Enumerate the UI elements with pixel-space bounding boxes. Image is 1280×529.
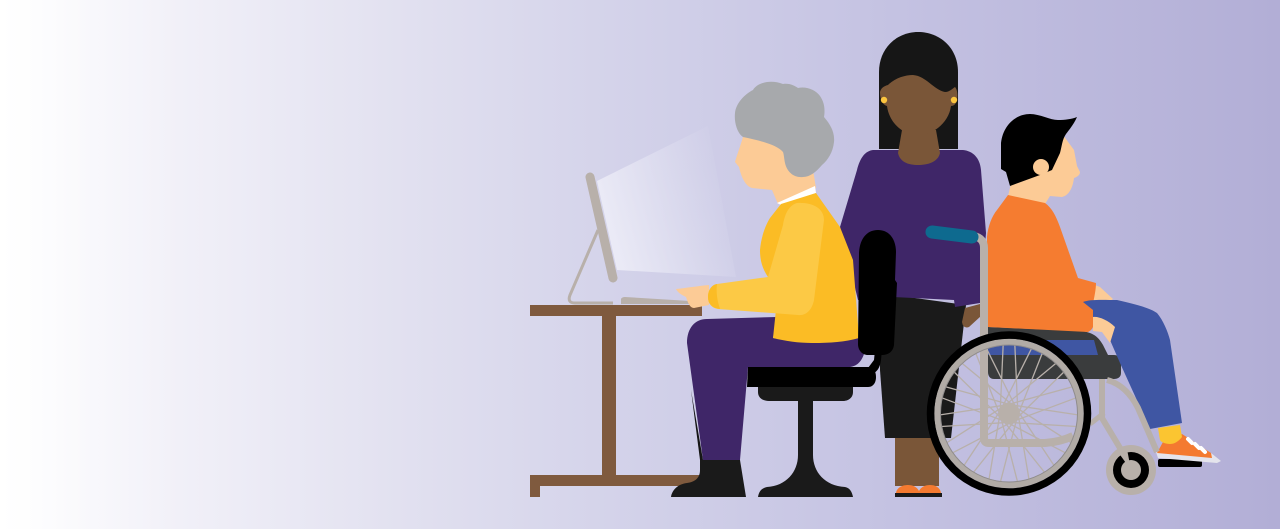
computer monitor (569, 126, 736, 304)
spokes (940, 345, 1078, 482)
ear (1033, 159, 1049, 175)
woman standing (840, 32, 986, 497)
wheelchair frame (974, 236, 1157, 468)
face (880, 75, 957, 135)
inner rim shade (940, 345, 1078, 482)
neck and face (735, 137, 816, 204)
long hair (879, 32, 958, 149)
sweater (760, 193, 859, 343)
purple top (840, 150, 986, 307)
seat cushion (988, 340, 1098, 355)
hub (998, 403, 1020, 424)
large wheel (930, 335, 1088, 492)
upper hand (1090, 285, 1113, 304)
small caster wheel (1106, 445, 1156, 495)
orange sweater (987, 195, 1096, 332)
boot (671, 460, 746, 497)
trousers (1083, 300, 1182, 429)
sleeve (708, 203, 824, 315)
man in wheelchair (987, 114, 1221, 467)
legs (895, 430, 939, 486)
hair (735, 82, 834, 177)
shoes (895, 485, 942, 497)
earrings (881, 97, 957, 103)
hand (676, 285, 709, 308)
hair (1001, 114, 1077, 186)
rim (938, 342, 1080, 485)
cuff (708, 284, 720, 309)
stem and base (758, 401, 853, 497)
woman seated at computer (671, 82, 865, 497)
hand (962, 304, 981, 327)
wheelchair handle (932, 232, 972, 237)
trouser shadow (691, 390, 703, 460)
seat base (758, 387, 853, 401)
neck and face (1008, 135, 1080, 204)
office chair (747, 230, 897, 497)
lower hand (1093, 317, 1115, 343)
desk (530, 305, 702, 497)
chair back (858, 230, 897, 355)
collar (777, 186, 816, 205)
tyre (930, 335, 1088, 492)
neck (898, 130, 940, 165)
sock (1158, 425, 1182, 444)
footrest (1158, 459, 1202, 467)
trousers (687, 317, 865, 460)
wheelchair seat (988, 327, 1121, 379)
skirt (880, 295, 966, 438)
seat (747, 367, 876, 387)
shoe (1156, 434, 1221, 463)
